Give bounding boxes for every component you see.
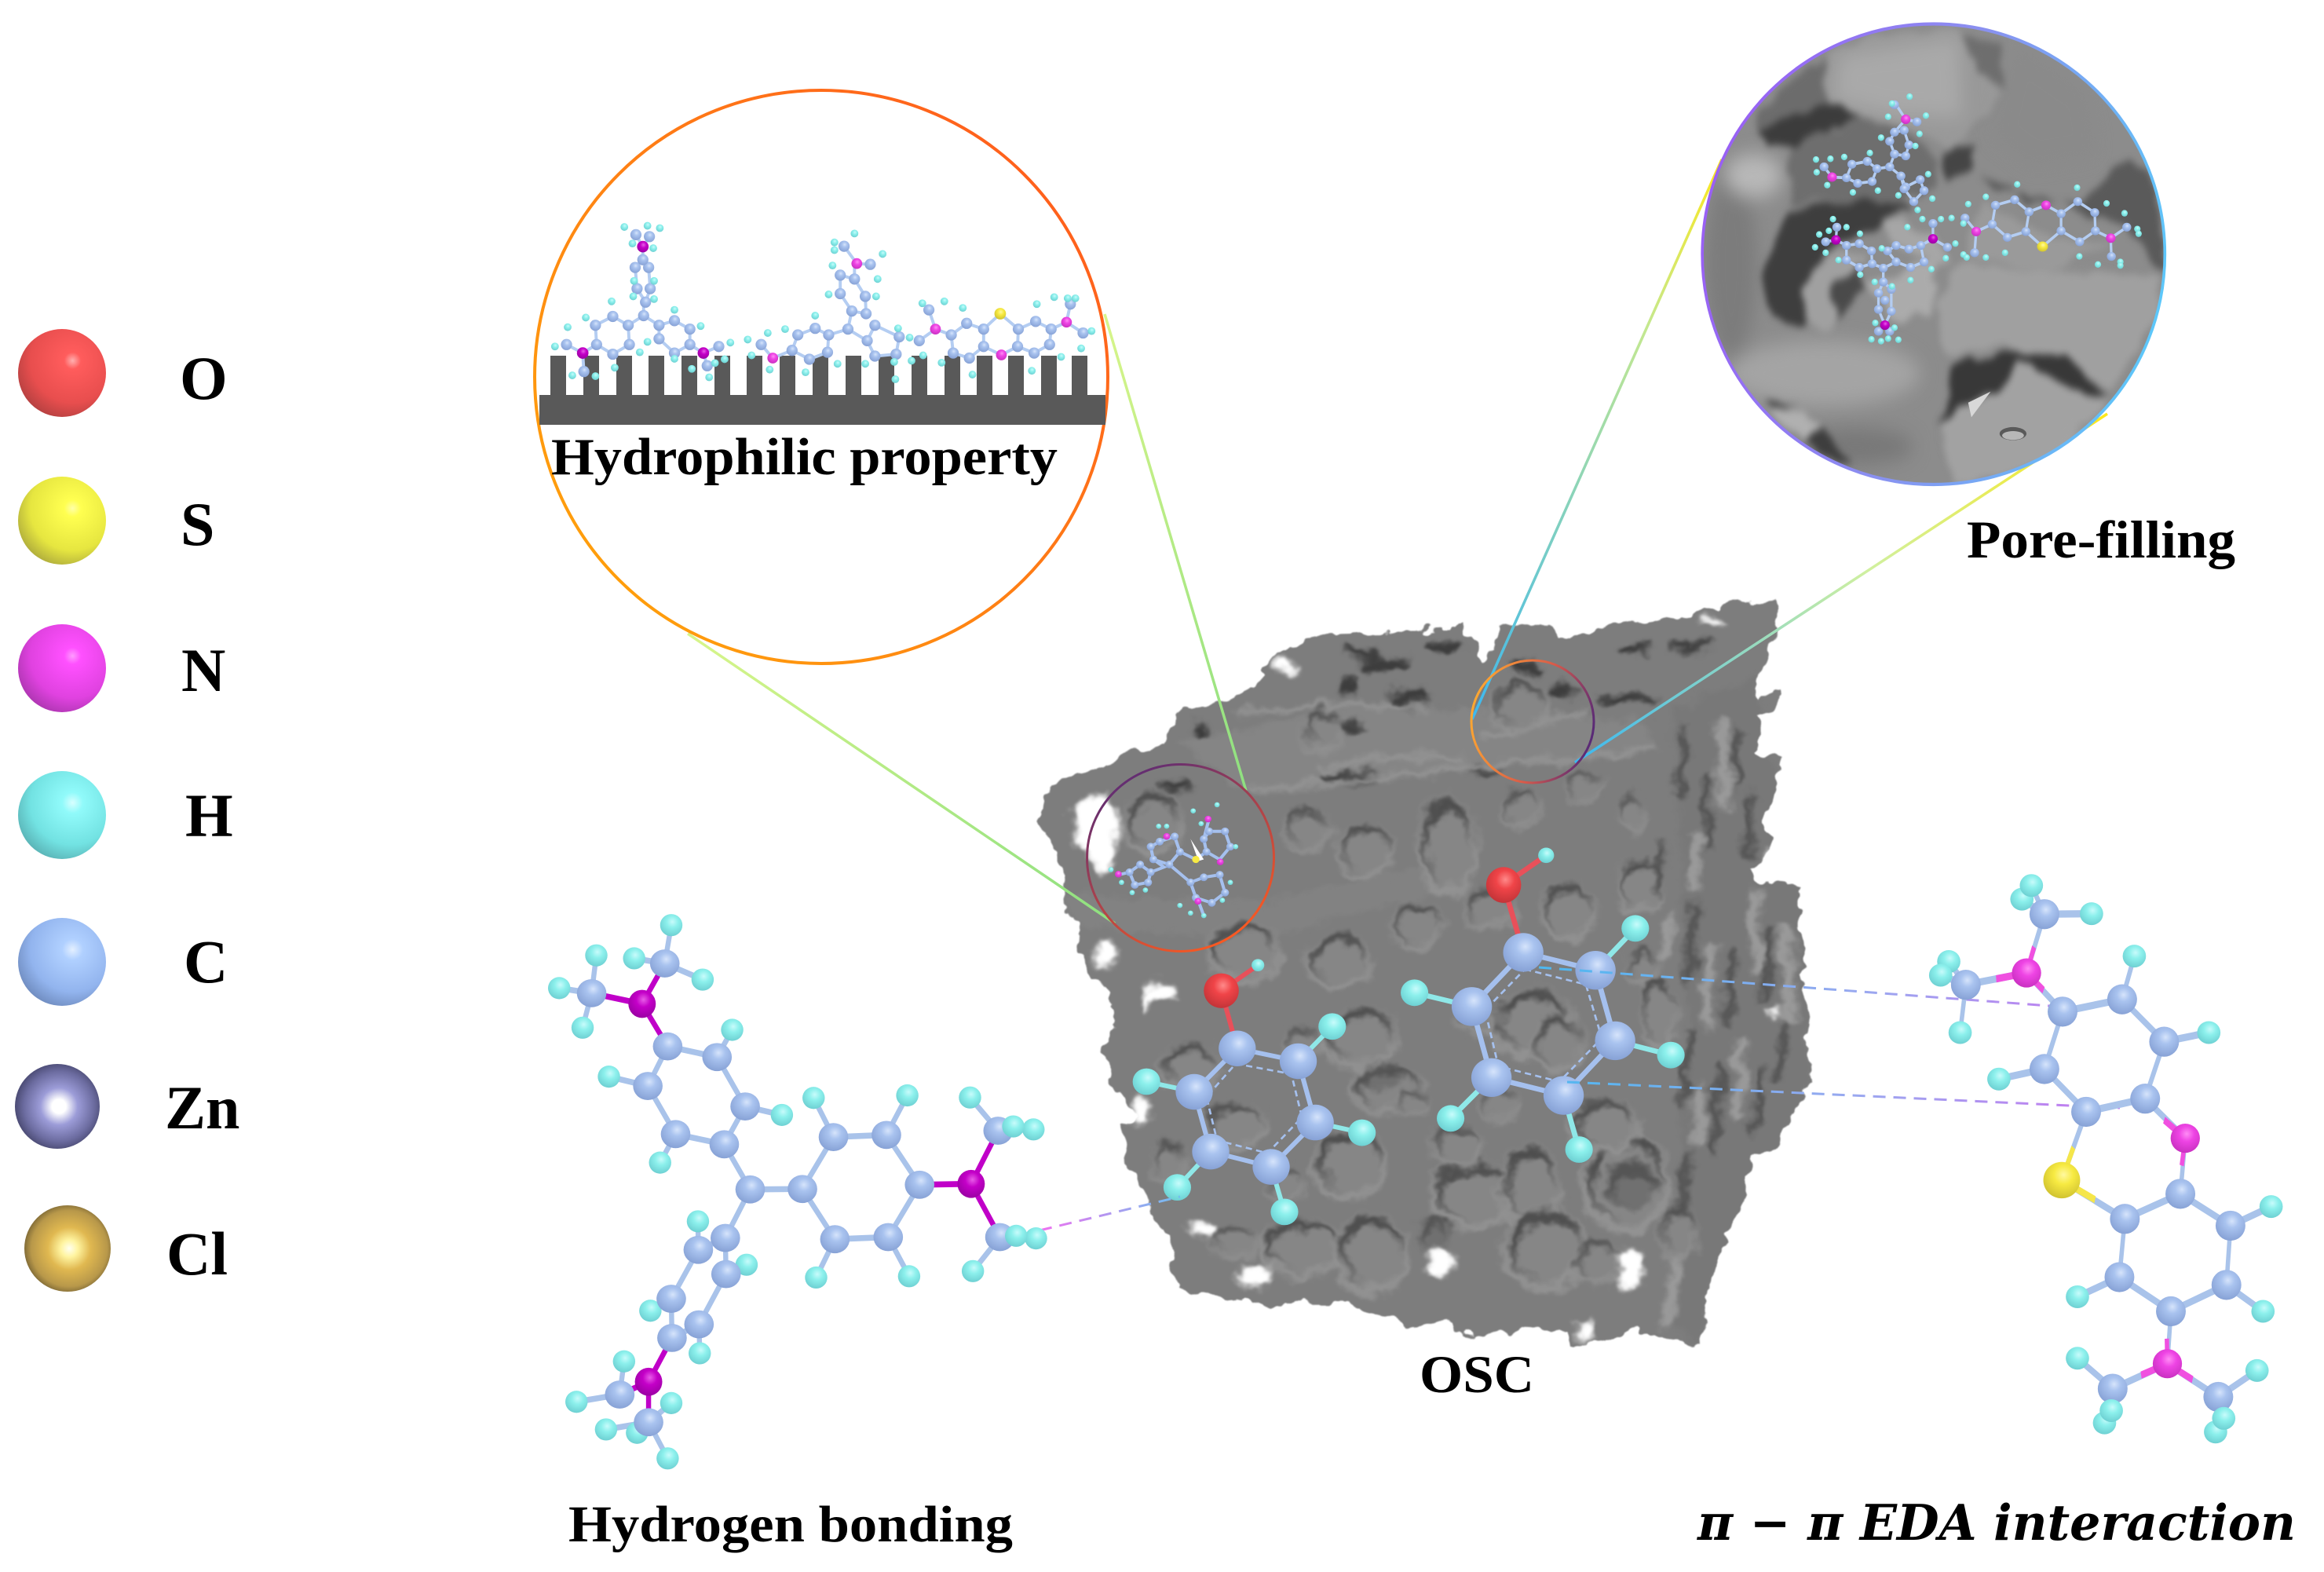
heading: hydrophilic property: Hydrophilic property [551, 428, 1058, 486]
magnifier ring on cube: pore site [1471, 660, 1594, 783]
phenol molecule right on cube [1401, 848, 1685, 1163]
legend item: hydrogen: H [185, 781, 233, 850]
white see-through holes [1074, 617, 1782, 1342]
leader lines from hydrophilic view to cube [688, 314, 1246, 923]
legend item: zinc [15, 1064, 239, 1149]
legend item: zinc: Zn [165, 1073, 239, 1142]
molecule adsorbed in cube pore [1109, 802, 1238, 918]
legend item: carbon: C [184, 927, 228, 996]
soft tonal shading [1705, 40, 2081, 468]
porous OSC cube [1036, 599, 1811, 1347]
phenol molecule left on cube [1133, 959, 1376, 1225]
panel: hydrophilic property [535, 90, 1108, 664]
light ledges [1238, 704, 1652, 791]
magnifier ring on cube: hydrophilic site [1087, 765, 1273, 952]
pores on front face [1281, 806, 1334, 850]
legend item: chlorine [24, 1205, 228, 1292]
dashed interaction lines: pi-pi EDA [1539, 967, 2120, 1108]
leader lines from pore-filling view to cube [1472, 159, 2107, 762]
molecule: hydrogen bonding partner [548, 914, 1047, 1469]
heading: pore-filling: Pore-filling [1967, 510, 2235, 569]
legend item: nitrogen [18, 624, 225, 712]
heading: pi-pi EDA interaction: π − π EDA interaction [1697, 1493, 2296, 1552]
vertical slits on right face [1657, 729, 1785, 1209]
panel: pore-filling close-up [1696, 8, 2235, 569]
legend item: hydrogen [18, 771, 233, 859]
shading [1668, 678, 1811, 1347]
slits on the top face [1161, 638, 1711, 791]
adsorbed molecules in pore [1824, 104, 2127, 331]
legend item: chlorine: Cl [166, 1219, 228, 1288]
comb surface [539, 356, 1105, 425]
legend item: sulfur: S [181, 490, 214, 558]
legend item: oxygen: O [180, 344, 228, 412]
legend item: nitrogen: N [181, 636, 225, 704]
dashed interaction line: hydrogen bond [1040, 1197, 1180, 1230]
molecule: pi-pi EDA partner [1929, 874, 2282, 1443]
legend item: oxygen [18, 329, 228, 417]
surface molecules [551, 222, 1095, 383]
legend: atom colour key [15, 329, 239, 1292]
crisp surface forms [1755, 30, 2165, 483]
heading: OSC: OSC [1420, 1344, 1534, 1404]
legend item: sulfur [18, 477, 214, 565]
legend item: carbon [18, 918, 228, 1006]
heading: hydrogen bonding: Hydrogen bonding [568, 1496, 1013, 1553]
